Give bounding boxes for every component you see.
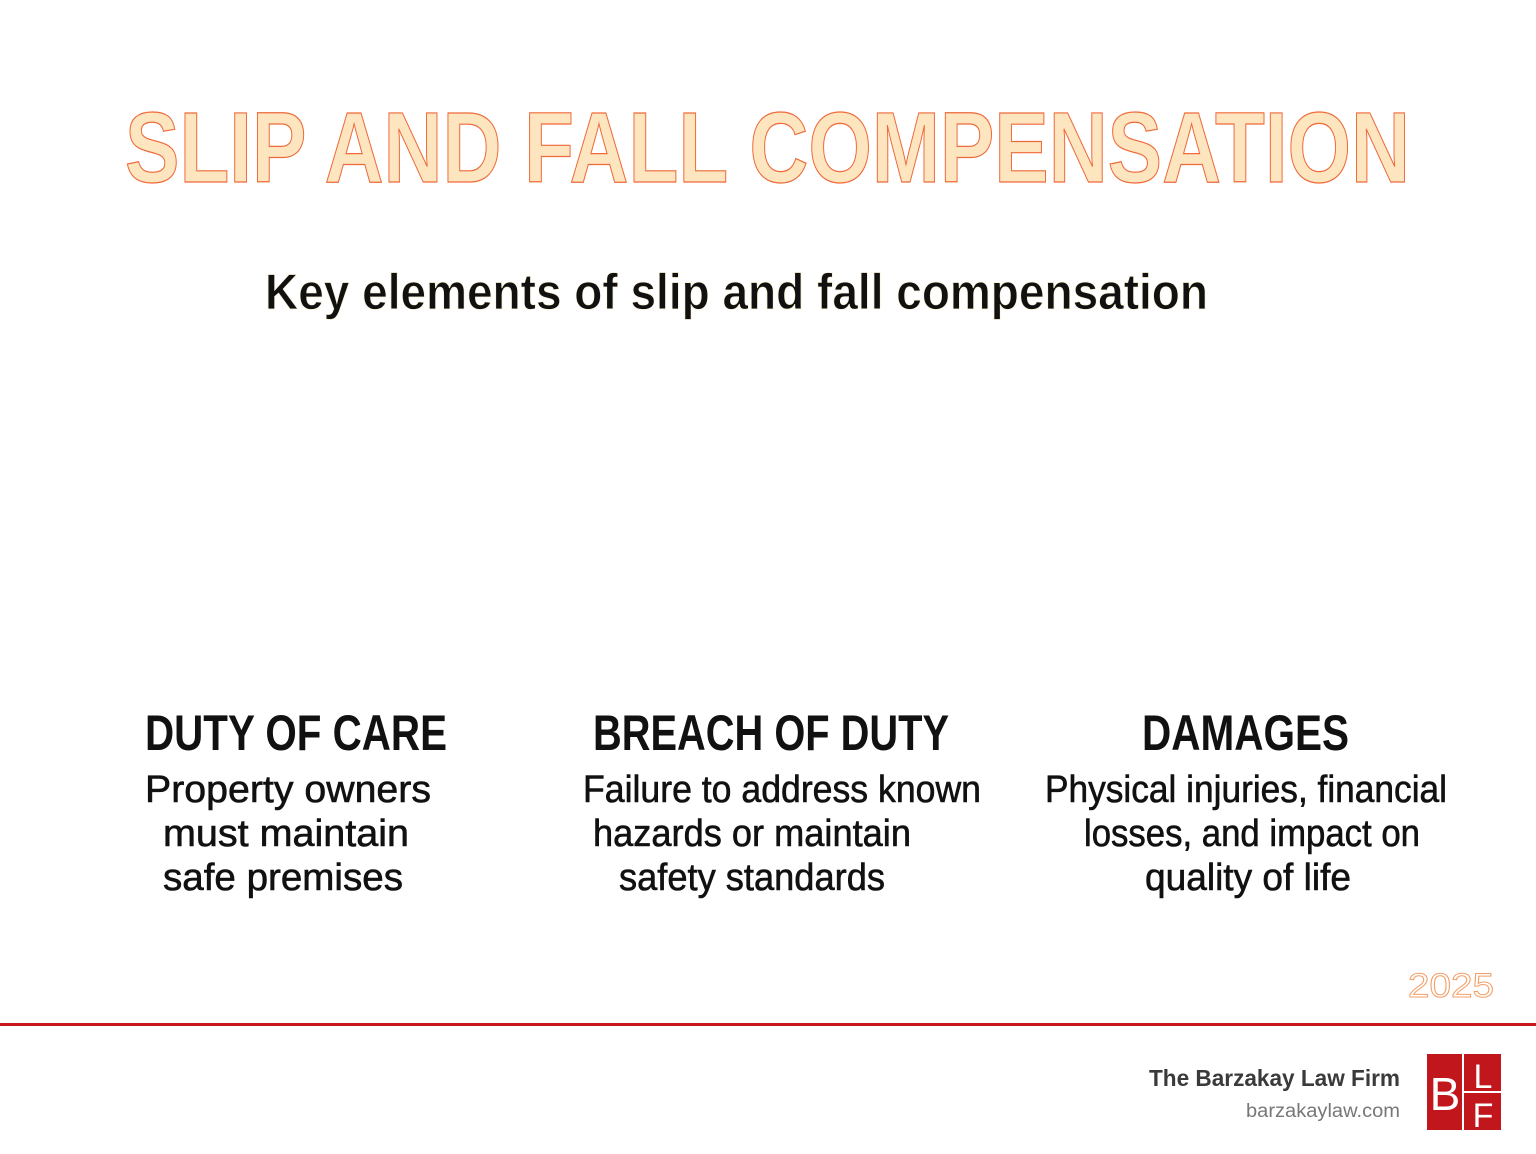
panel: breach of duty <box>583 705 981 899</box>
panel: duty of care <box>145 705 447 899</box>
text block: breach of duty: safety standards <box>619 857 885 899</box>
firm name: The Barzakay Law Firm <box>1149 1065 1400 1091</box>
text block: breach of duty: Failure to address known <box>583 769 981 811</box>
year label: 2025 <box>1408 967 1494 1005</box>
text block: damages: Physical injuries, financial <box>1045 769 1447 811</box>
text block: breach of duty: hazards or maintain <box>593 813 911 855</box>
panel: damages <box>1045 705 1447 899</box>
heading: breach of duty: BREACH OF DUTY <box>593 705 949 761</box>
text block: duty of care <box>145 769 431 899</box>
icon: BLF logo: F <box>1473 1097 1493 1135</box>
icon: BLF logo <box>1427 1054 1501 1135</box>
text block: damages: losses, and impact on <box>1084 813 1420 855</box>
icon: BLF logo: B <box>1430 1068 1460 1120</box>
text block: duty of care: safe premises <box>163 857 403 899</box>
divider line <box>0 1023 1536 1026</box>
firm name <box>1149 1065 1400 1122</box>
text block: damages <box>1045 769 1447 899</box>
heading: damages: DAMAGES <box>1142 705 1349 761</box>
subtitle: Key elements of slip and fall compensation <box>265 264 1208 320</box>
text block: duty of care: Property owners <box>145 769 431 811</box>
firm name: barzakaylaw.com <box>1246 1101 1400 1122</box>
text block: breach of duty <box>583 769 981 899</box>
heading: duty of care: DUTY OF CARE <box>145 705 447 761</box>
text block: duty of care: must maintain <box>163 813 409 855</box>
text block: damages: quality of life <box>1145 857 1351 899</box>
icon: BLF logo: L <box>1474 1058 1492 1096</box>
